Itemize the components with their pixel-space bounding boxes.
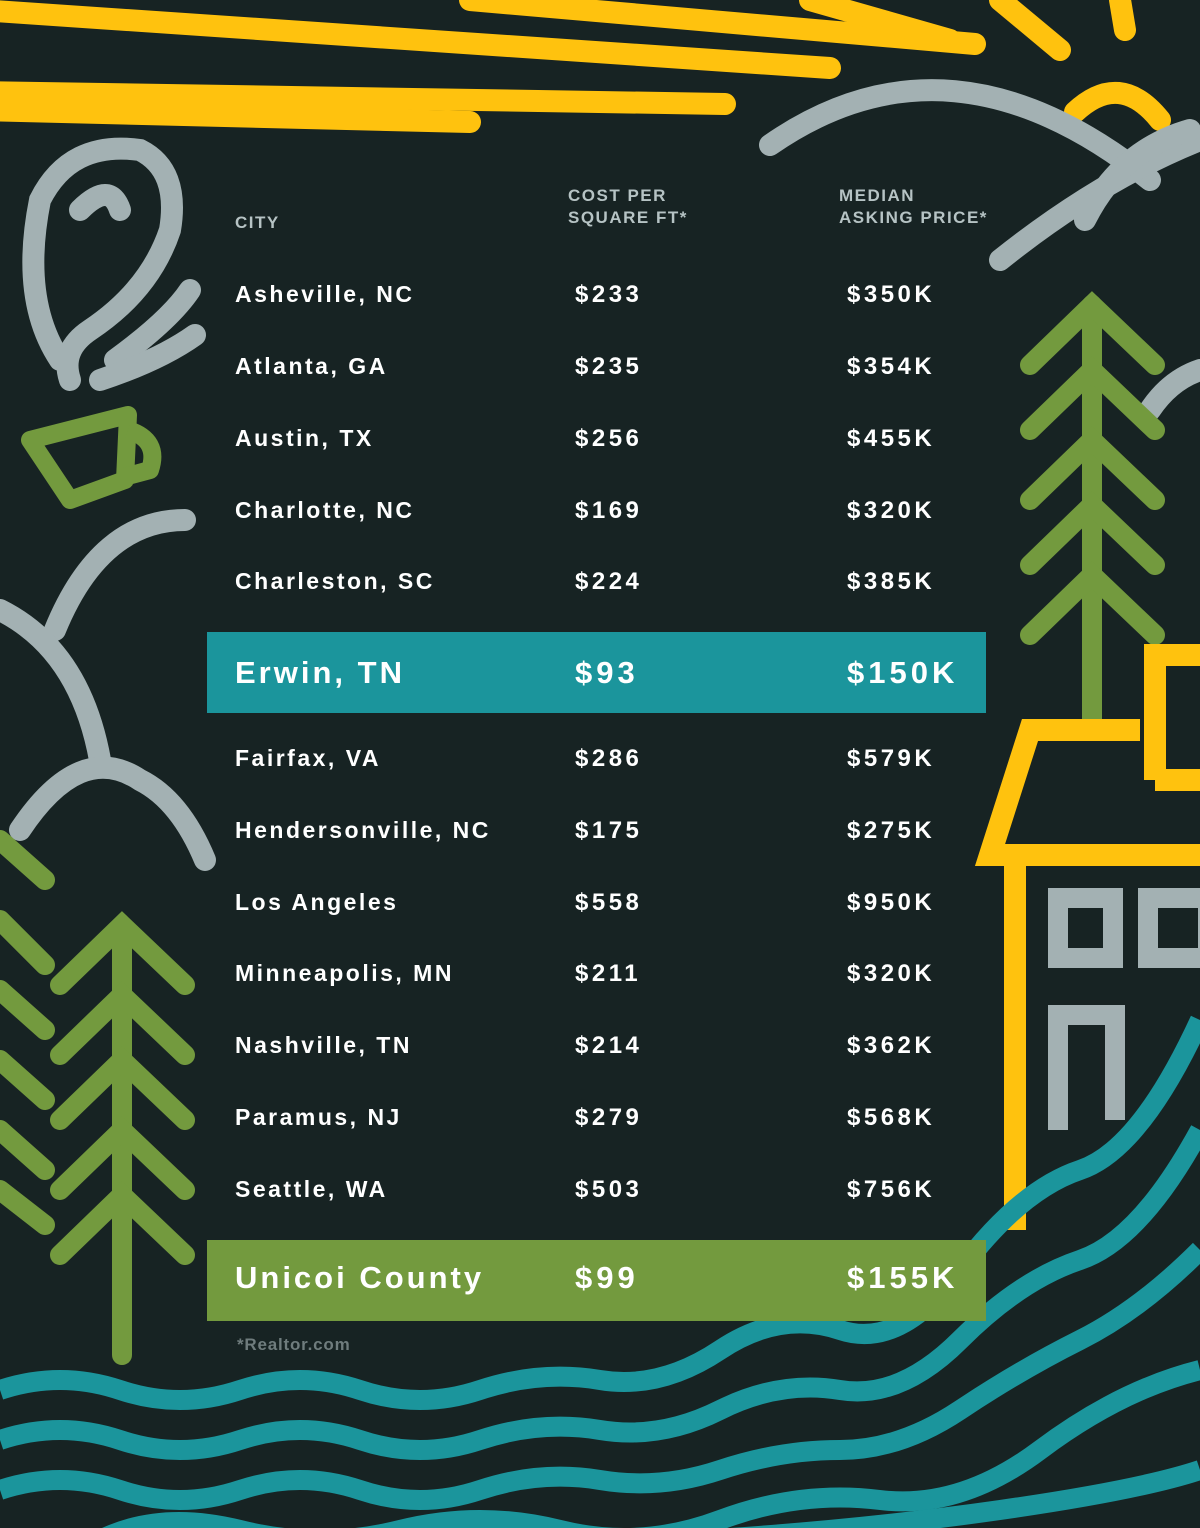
text: $233 <box>575 281 642 308</box>
text: $286 <box>575 745 642 772</box>
text: $279 <box>575 1104 642 1131</box>
text: ASKING PRICE* <box>839 208 988 227</box>
text: Los Angeles <box>235 889 398 915</box>
text: $579K <box>847 745 935 772</box>
text: $354K <box>847 353 935 380</box>
text: Seattle, WA <box>235 1176 388 1202</box>
text: $455K <box>847 425 935 452</box>
tree right <box>1030 305 1155 720</box>
trees left <box>0 840 185 1355</box>
text: Austin, TX <box>235 425 374 451</box>
text: COST PER <box>568 186 667 205</box>
text: $224 <box>575 568 642 595</box>
text: $93 <box>575 655 639 690</box>
text: $558 <box>575 889 642 916</box>
text: $275K <box>847 817 935 844</box>
text: $362K <box>847 1032 935 1059</box>
text: Hendersonville, NC <box>235 817 491 843</box>
text: $169 <box>575 497 642 524</box>
text: $568K <box>847 1104 935 1131</box>
coffee mug <box>30 415 152 500</box>
text: $211 <box>575 960 641 987</box>
text: $350K <box>847 281 935 308</box>
table <box>235 186 988 1295</box>
text: $155K <box>847 1260 958 1295</box>
text: $150K <box>847 655 958 690</box>
text: Minneapolis, MN <box>235 960 454 986</box>
text: $385K <box>847 568 935 595</box>
text: $320K <box>847 960 935 987</box>
footnote: *Realtor.com <box>237 1335 351 1354</box>
text: $503 <box>575 1176 642 1203</box>
text: Erwin, TN <box>235 655 405 690</box>
grey hills and swirl <box>0 90 1200 860</box>
text: Charlotte, NC <box>235 497 414 523</box>
text: SQUARE FT* <box>568 208 688 227</box>
text: $756K <box>847 1176 935 1203</box>
text: $256 <box>575 425 642 452</box>
text: Fairfax, VA <box>235 745 381 771</box>
band: Erwin <box>207 632 986 713</box>
text: Paramus, NJ <box>235 1104 402 1130</box>
text: Nashville, TN <box>235 1032 412 1058</box>
rows: Asheville, NC <box>235 281 414 307</box>
text: $175 <box>575 817 642 844</box>
text: $235 <box>575 353 642 380</box>
text: Charleston, SC <box>235 568 435 594</box>
text: Atlanta, GA <box>235 353 388 379</box>
header: CITY <box>235 213 280 232</box>
text: $214 <box>575 1032 642 1059</box>
text: MEDIAN <box>839 186 915 205</box>
waves <box>0 1020 1200 1528</box>
band: Unicoi <box>207 1240 986 1321</box>
text: $950K <box>847 889 935 916</box>
text: Unicoi County <box>235 1260 484 1295</box>
text: $99 <box>575 1260 639 1295</box>
text: $320K <box>847 497 935 524</box>
sun rays <box>0 0 1160 122</box>
house <box>990 655 1200 1230</box>
